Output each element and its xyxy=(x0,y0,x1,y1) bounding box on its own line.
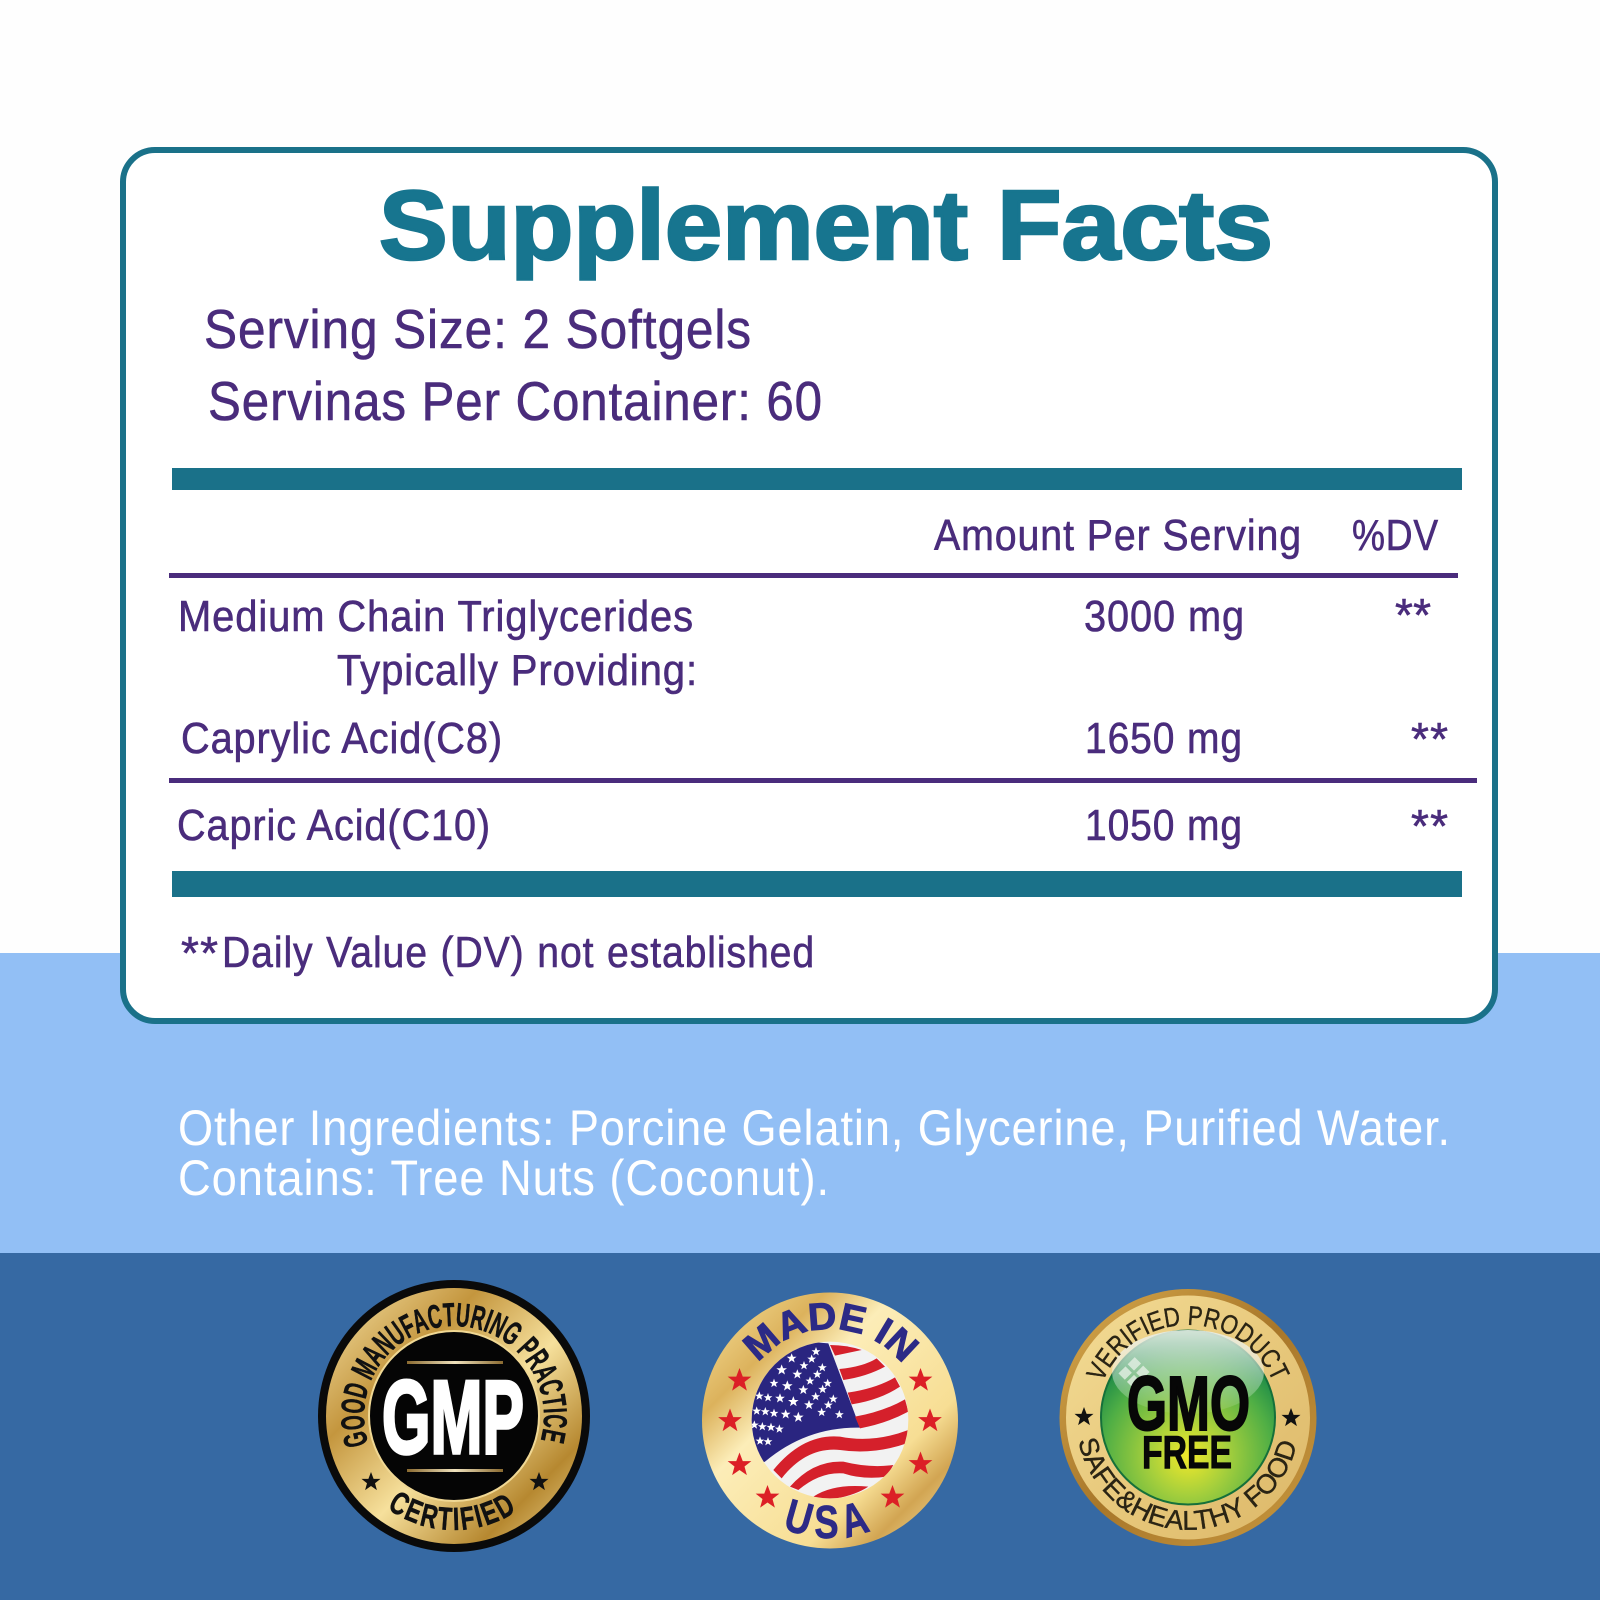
footnote: Daily Value (DV) not established xyxy=(222,928,815,977)
row: medium chain triglycerides: 3000 mg xyxy=(1084,592,1245,641)
GMP stars xyxy=(362,1472,548,1490)
badge: GMP certified xyxy=(318,1280,590,1552)
badge: made in USA xyxy=(702,1292,958,1548)
other ingredients text: Other Ingredients: Porcine Gelatin, Glycerine, Purified Water. xyxy=(178,1100,1451,1156)
purple rule under header xyxy=(169,573,1458,578)
top teal bar xyxy=(172,468,1462,490)
title xyxy=(379,170,1273,280)
servings per container: Servinas Per Container: 60 xyxy=(208,370,823,432)
other ingredients text: Contains: Tree Nuts (Coconut). xyxy=(178,1150,830,1206)
badge: GMO free xyxy=(1060,1289,1316,1546)
column header: amount per serving: Amount Per Serving xyxy=(934,511,1302,560)
row: capric acid: 1050 mg xyxy=(1085,801,1243,850)
GMO window highlight xyxy=(1118,1357,1150,1388)
row: caprylic acid xyxy=(181,713,1449,765)
GMP center letters: GMP xyxy=(382,1360,524,1476)
background: white upper area xyxy=(0,0,1600,953)
purple rule between rows xyxy=(169,778,1477,783)
row: medium chain triglycerides: Typically Providing: xyxy=(337,646,698,695)
row: medium chain triglycerides: Medium Chain Triglycerides xyxy=(178,592,694,641)
GMP lower arc text: CERTIFIED xyxy=(390,1492,513,1530)
VERIFIED PRODUCT arc text: VERIFIED PRODUCT xyxy=(1086,1306,1290,1378)
bottom teal bar xyxy=(172,871,1462,897)
serving size: Serving Size: 2 Softgels xyxy=(204,298,752,360)
SAFE & HEALTHY FOOD arc text: SAFE&HEALTHY FOOD xyxy=(1080,1438,1295,1530)
USA flag xyxy=(752,1342,908,1498)
row: capric acid: Capric Acid(C10) xyxy=(177,801,491,850)
row: caprylic acid: 1650 mg xyxy=(1085,714,1243,763)
other ingredients text xyxy=(178,1100,1451,1206)
row: capric acid: ** xyxy=(1411,800,1449,852)
title: Supplement xyxy=(379,170,968,280)
row: medium chain triglycerides xyxy=(178,589,1432,695)
row: caprylic acid: Caprylic Acid(C8) xyxy=(181,714,503,763)
GMP gold lines xyxy=(407,1361,503,1472)
background: light blue band xyxy=(0,953,1600,1253)
row: medium chain triglycerides: ** xyxy=(1395,589,1432,641)
row: capric acid xyxy=(177,800,1449,852)
card frame xyxy=(123,150,1495,1021)
title: Facts xyxy=(997,170,1273,280)
GMO stars xyxy=(1074,1407,1300,1426)
background: dark blue band xyxy=(0,1253,1600,1600)
footnote: ** xyxy=(181,927,219,979)
column header: percent daily value: %DV xyxy=(1352,511,1439,560)
panel: supplement facts card xyxy=(123,150,1495,1021)
row: caprylic acid: ** xyxy=(1411,713,1449,765)
MADE IN arc text: MADE IN xyxy=(742,1302,920,1362)
FREE letters: FREE xyxy=(1142,1426,1232,1478)
GMP upper arc text: GOOD MANUFACTURING PRACTICE xyxy=(341,1302,568,1447)
red stars xyxy=(718,1368,942,1508)
USA arc text: USA xyxy=(786,1498,871,1539)
GMO letters: GMO xyxy=(1127,1361,1250,1447)
